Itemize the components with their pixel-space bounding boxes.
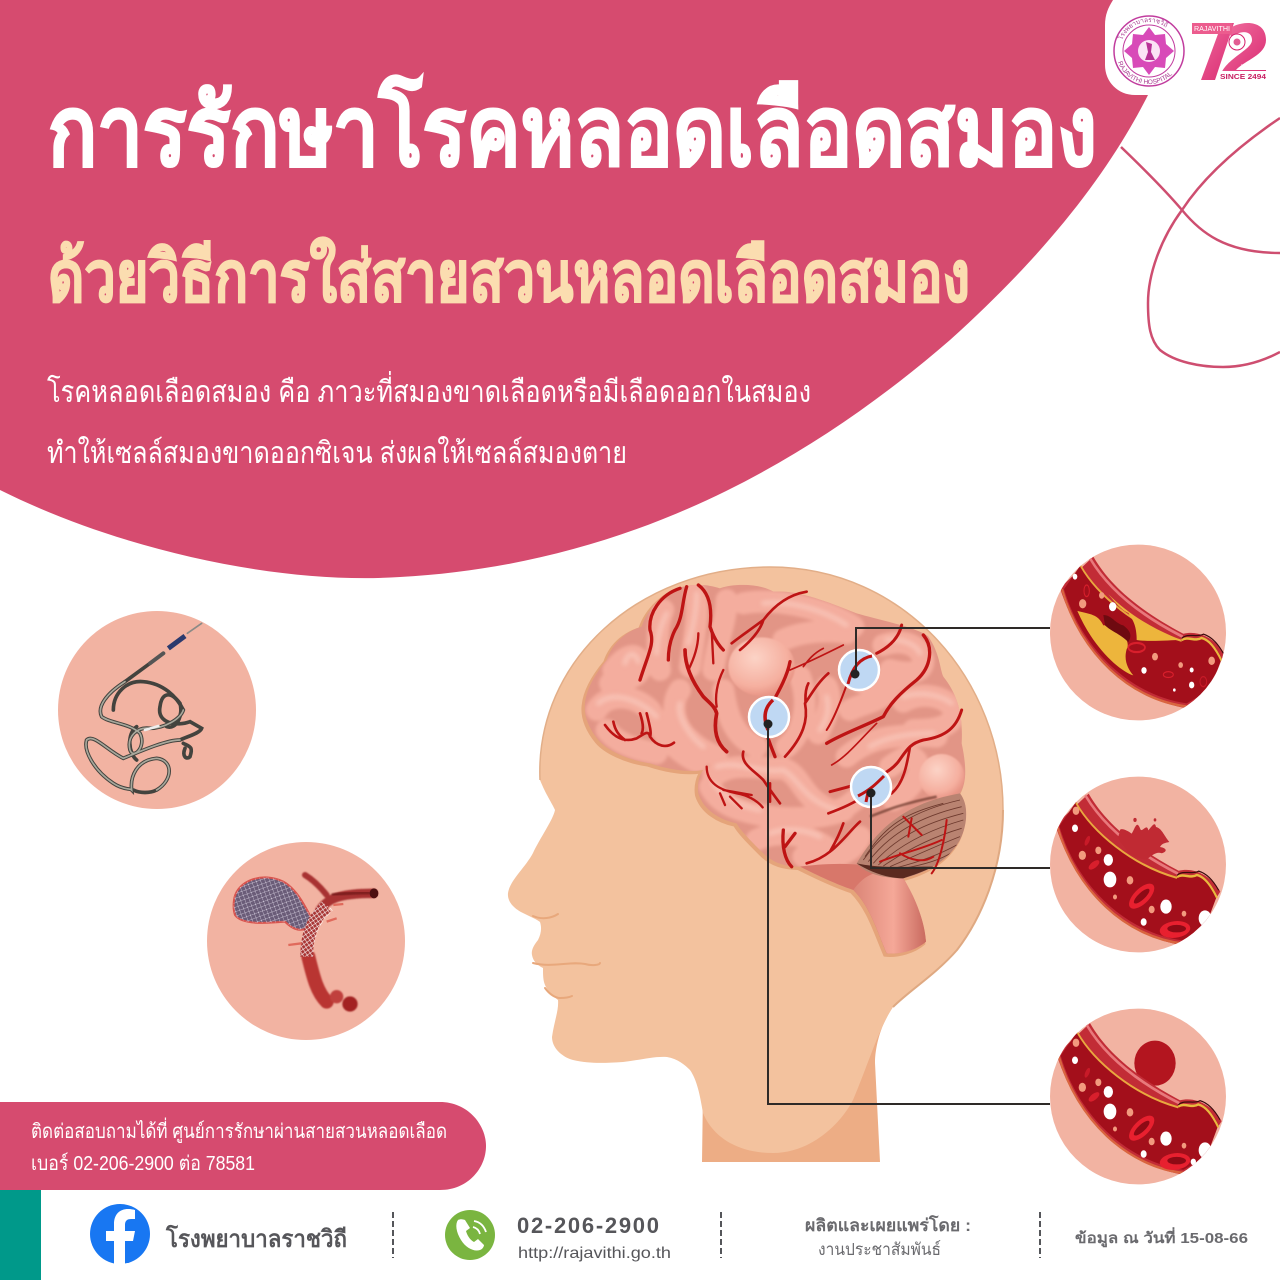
header panel: ทำให้เซลล์สมองขาดออกซิเจน ส่งผลให้เซลล์สมองตาย: [47, 436, 627, 470]
brain halo: [583, 587, 964, 956]
brain lobes: [585, 584, 966, 954]
back skull shading: [893, 810, 1003, 1007]
72 years logo: SINCE 2494: [1220, 72, 1267, 81]
aneurysm bulge: [1134, 1041, 1176, 1086]
plaque: [1077, 611, 1133, 675]
facebook name: โรงพยาบาลราชวิถี: [165, 1224, 347, 1253]
intro text: โรคหลอดเลือดสมอง คือ ภาวะที่สมองขาดเลือดหรือมีเลือดออกในสมอง: [47, 371, 811, 409]
circle: aneurysm: [1050, 1009, 1226, 1184]
circle: coil device: [58, 611, 256, 809]
arteries: [605, 585, 962, 873]
contact panel: ติดต่อสอบถามได้ที่ ศูนย์การรักษาผ่านสายสวนหลอดเลือด: [31, 1117, 447, 1144]
aneurysm with coil mesh: [234, 877, 313, 930]
72 years logo: RAJAVITHI: [1194, 24, 1230, 33]
gyri highlights: [598, 593, 952, 837]
circle: stent and aneurysm: [207, 842, 405, 1040]
blood splash: [1118, 824, 1169, 860]
parent artery: [305, 875, 373, 1012]
marker: middle lesion: [749, 697, 789, 737]
footer: งานประชาสัมพันธ์: [818, 1240, 941, 1259]
head silhouette: [508, 567, 1003, 1153]
marker: upper lesion: [839, 650, 879, 690]
date: ข้อมูล ณ วันที่ 15-08-66: [1075, 1227, 1248, 1248]
72 years logo: [1192, 23, 1267, 81]
phone number: 02-206-2900: [517, 1213, 659, 1238]
nose and lips: [533, 914, 600, 998]
callout lines: [764, 628, 1050, 1104]
gyri bodies: [597, 593, 954, 859]
circle: ruptured artery: [1050, 777, 1226, 952]
icon: phone: [445, 1210, 495, 1260]
head illustration: [508, 567, 1003, 1162]
coil wire: [86, 663, 202, 792]
publisher: ผลิตและเผยแพร่โดย :: [805, 1215, 971, 1235]
contact panel: [0, 1102, 486, 1190]
hospital seal: โรงพยาบาลราชวิถี: [1117, 18, 1168, 38]
72 years logo: YEARS: [1241, 65, 1263, 71]
cerebellum: [857, 793, 966, 878]
header panel: [0, 0, 1148, 578]
neck shadow: [702, 1007, 893, 1162]
brain illustration: [582, 583, 966, 957]
marker: lower lesion: [851, 767, 891, 807]
frontal dome: [728, 637, 795, 696]
hospital seal: RAJAVITHI HOSPITAL: [1118, 60, 1172, 84]
website: http://rajavithi.go.th: [518, 1245, 671, 1262]
circle: narrowed artery with plaque: [1050, 545, 1226, 720]
footer: [0, 1190, 1248, 1280]
brainstem: [800, 864, 928, 955]
subtitle: ด้วยวิธีการใส่สายสวนหลอดเลือดสมอง: [48, 236, 970, 316]
contact panel: เบอร์ 02-206-2900 ต่อ 78581: [31, 1152, 255, 1175]
logo panel: [1105, 0, 1267, 95]
decorative curves: [1121, 118, 1280, 367]
icon: facebook: [90, 1204, 150, 1264]
stent: [307, 907, 327, 957]
hospital seal: [1113, 15, 1185, 87]
main title: การรักษาโรคหลอดเลือดสมอง: [48, 75, 1097, 186]
